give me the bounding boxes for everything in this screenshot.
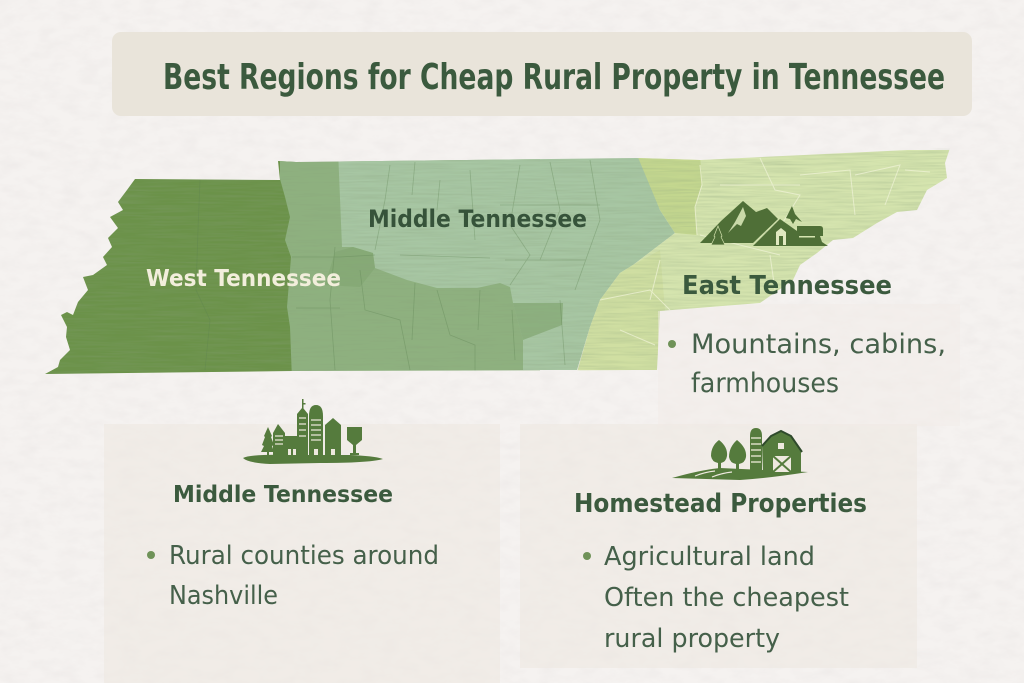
- bullet list: rural property: [604, 624, 780, 654]
- region: Middle Tennessee south band: [280, 150, 540, 380]
- bullet list: [668, 329, 946, 399]
- East lower valley: [577, 250, 665, 372]
- region: West Tennessee: [45, 161, 300, 374]
- bullet list: Often the cheapest: [604, 583, 849, 613]
- region: Middle Tennessee north basin: [338, 150, 675, 370]
- bullet list: [583, 542, 849, 654]
- map label: Middle Tennessee: Middle Tennessee: [368, 205, 587, 233]
- heading: East Tennessee: East Tennessee: [682, 271, 892, 301]
- region: East Tennessee: [577, 150, 960, 380]
- bullet list: farmhouses: [691, 368, 839, 399]
- panel: East Tennessee card: [658, 201, 960, 426]
- map label: West Tennessee: West Tennessee: [146, 266, 341, 292]
- bullet list: Rural counties around: [169, 541, 439, 571]
- icon: city skyline: [243, 399, 383, 464]
- Tennessee map: [40, 140, 960, 380]
- heading: Middle Tennessee: Middle Tennessee: [173, 482, 393, 508]
- bullet list: Agricultural land: [604, 542, 815, 572]
- bullet list: Mountains, cabins,: [691, 329, 946, 360]
- panel: Middle Tennessee card: [104, 399, 500, 683]
- East Tennessee plateau band: [637, 155, 702, 235]
- panel: Homestead Properties card: [520, 424, 917, 668]
- icon: barn and silo: [672, 428, 808, 480]
- bullet list: Nashville: [169, 581, 278, 611]
- title banner: [112, 32, 972, 116]
- county lines light: [600, 158, 930, 345]
- county lines dark: [292, 160, 600, 370]
- heading: Homestead Properties: Homestead Properties: [574, 489, 867, 519]
- map grain: [40, 140, 960, 380]
- darker county patch: [325, 247, 563, 340]
- bullet list: [147, 541, 439, 611]
- icon: mountains and cabin: [700, 201, 828, 246]
